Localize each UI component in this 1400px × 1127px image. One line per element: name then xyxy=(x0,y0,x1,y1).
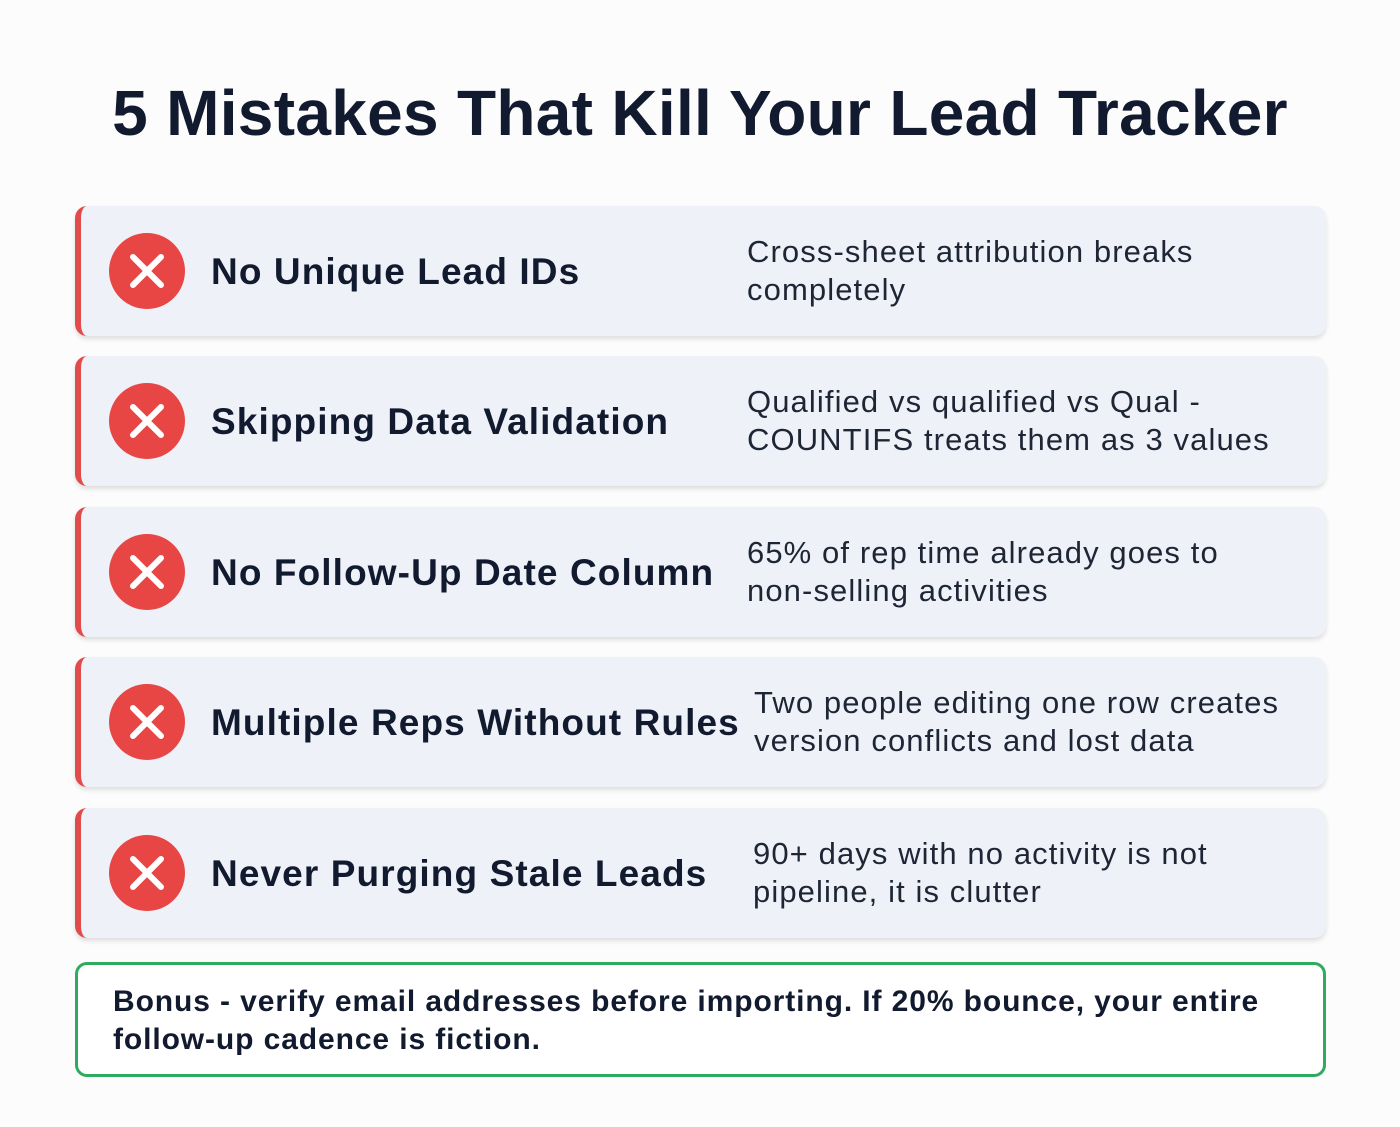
bonus callout xyxy=(75,962,1326,1077)
description: 90+ days with no activity is not xyxy=(753,836,1208,871)
description xyxy=(747,234,1194,307)
icon: x circle xyxy=(109,684,185,760)
icon: x circle xyxy=(109,383,185,459)
heading: No Unique Lead IDs xyxy=(211,251,580,292)
description: Two people editing one row creates xyxy=(754,685,1279,720)
card: no follow-up date xyxy=(75,507,1326,637)
title: 5 Mistakes That Kill Your Lead Tracker xyxy=(112,77,1288,149)
bonus callout: follow-up cadence is fiction. xyxy=(113,1023,541,1056)
description: Cross-sheet attribution breaks xyxy=(747,234,1194,269)
heading: Skipping Data Validation xyxy=(211,401,669,442)
heading: Multiple Reps Without Rules xyxy=(211,702,740,743)
card: no unique lead ids xyxy=(75,206,1326,336)
card: multiple reps xyxy=(75,657,1326,787)
card: skipping data validation xyxy=(75,356,1326,486)
heading: No Follow-Up Date Column xyxy=(211,552,714,593)
bonus callout: Bonus - verify email addresses before importing. If 20% bounce, your entire xyxy=(113,985,1259,1018)
card: stale leads xyxy=(75,808,1326,938)
description: COUNTIFS treats them as 3 values xyxy=(747,422,1270,457)
heading: Never Purging Stale Leads xyxy=(211,853,707,894)
icon: x circle xyxy=(109,534,185,610)
description: non-selling activities xyxy=(747,573,1049,608)
description: pipeline, it is clutter xyxy=(753,874,1042,909)
icon: x circle xyxy=(109,835,185,911)
description xyxy=(747,535,1219,608)
description xyxy=(754,685,1279,758)
description: 65% of rep time already goes to xyxy=(747,535,1219,570)
description xyxy=(753,836,1208,909)
description: completely xyxy=(747,272,906,307)
description: version conflicts and lost data xyxy=(754,723,1195,758)
description xyxy=(747,384,1270,457)
icon: x circle xyxy=(109,233,185,309)
description: Qualified vs qualified vs Qual - xyxy=(747,384,1201,419)
